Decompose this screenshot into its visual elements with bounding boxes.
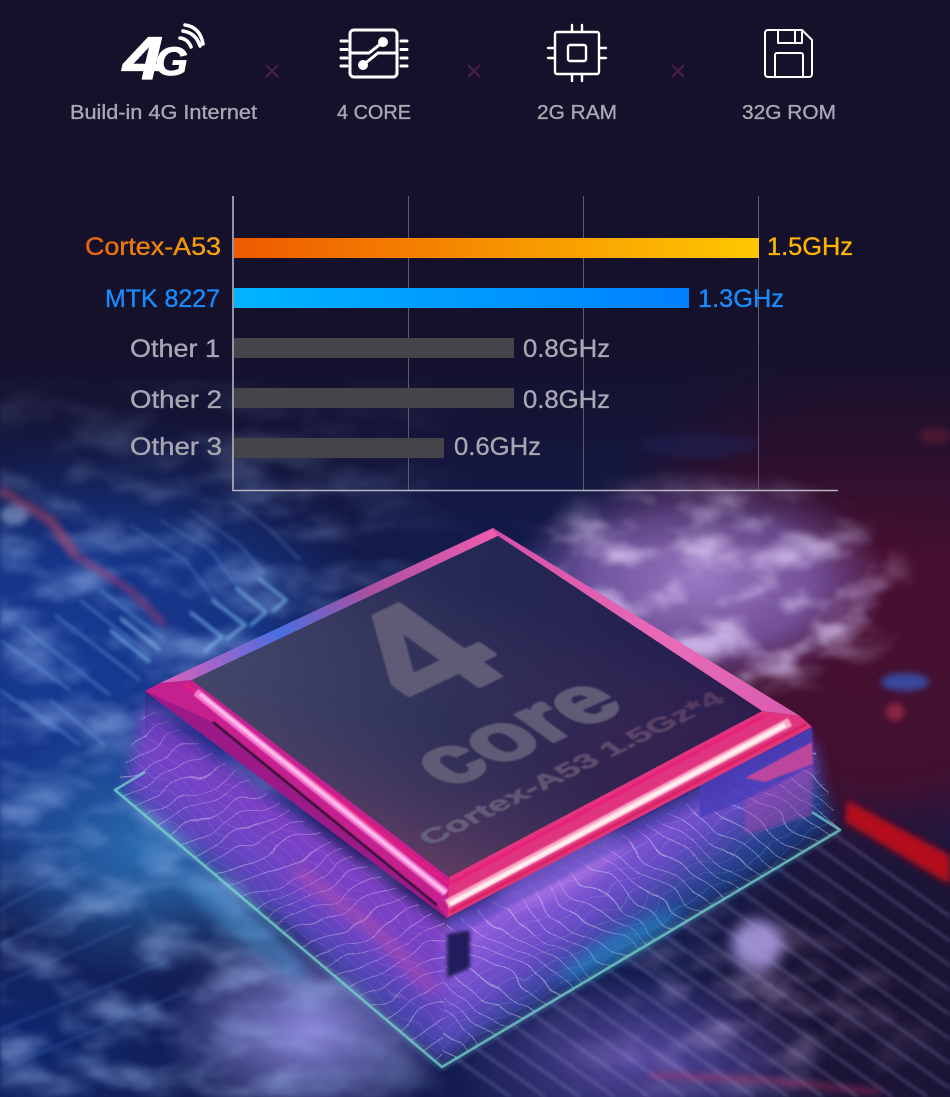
chip frame: right front band xyxy=(447,711,812,918)
row: Cortex-A53: 1.5GHz xyxy=(767,233,853,261)
circuit pad glow xyxy=(125,705,832,1060)
circuit pad outer traces xyxy=(442,830,950,1097)
row: Other 1: Other 1 xyxy=(130,335,220,363)
chip frame glow lines xyxy=(185,684,806,912)
chip frame: top left edge xyxy=(160,528,498,683)
chip frame: left front band xyxy=(145,680,449,918)
row: Cortex-A53 xyxy=(85,233,853,261)
row: Other 3: 0.6GHz xyxy=(454,433,541,461)
row: MTK 8227: MTK 8227 xyxy=(105,285,220,313)
row: Other 2 xyxy=(130,386,610,414)
chip block sides xyxy=(145,691,813,978)
background accent: colored traces xyxy=(0,427,950,1092)
separator xyxy=(468,65,480,77)
row: Other 2: Other 2 xyxy=(130,386,222,414)
circuit pad traces: right xyxy=(442,741,840,1062)
label: 2G RAM: 2G RAM xyxy=(537,102,617,124)
row: Other 3: Other 3 xyxy=(130,433,222,461)
icon: 4 core chip xyxy=(341,30,407,77)
icon: RAM chip xyxy=(548,25,606,81)
feature row xyxy=(70,25,836,124)
chip marking: 4 core text: Cortex-A53 1.5Gz*4 xyxy=(411,687,732,849)
background texture: blue mottling xyxy=(0,380,480,1097)
row: Cortex-A53: Cortex-A53 xyxy=(85,233,221,261)
background traces: chevrons beside chip xyxy=(110,578,286,662)
row: Other 1 xyxy=(130,335,610,363)
chart grid xyxy=(408,196,758,490)
chip marking: 4 core text xyxy=(294,574,732,849)
label: build-in 4G internet: Build-in 4G Internet xyxy=(70,102,257,124)
separator xyxy=(672,65,684,77)
label: 32G ROM: 32G ROM xyxy=(742,102,836,124)
icon: ROM floppy disk xyxy=(765,30,812,77)
chart axes xyxy=(233,196,838,490)
row: Other 2: 0.8GHz xyxy=(523,386,610,414)
circuit pad highlights xyxy=(173,819,687,990)
background texture: lavender traces xyxy=(536,473,912,697)
chip marking: 4 core text: 4 xyxy=(294,574,547,733)
label: 4 core: 4 CORE xyxy=(337,102,411,124)
icon: 4G signal: G xyxy=(155,40,188,84)
background traces: left xyxy=(0,500,300,1070)
row: Other 1: 0.8GHz xyxy=(523,335,610,363)
circuit pad traces: left xyxy=(116,705,447,1060)
circuit pad outline xyxy=(115,772,840,1067)
background texture: lower right traces xyxy=(550,902,930,1097)
icon: 4G signal: 4 xyxy=(122,25,163,92)
chip frame: left outer shade xyxy=(145,691,447,918)
processor chip on circuit pad xyxy=(80,528,950,1097)
chip frame: top right edge xyxy=(493,528,800,716)
row: MTK 8227 xyxy=(105,285,784,313)
separator xyxy=(266,65,278,77)
bar chart: clock speed comparison xyxy=(85,196,853,490)
row: Other 3 xyxy=(130,433,541,461)
chip marking: 4 core text: core xyxy=(384,662,643,800)
background accent: dark top fade xyxy=(0,0,950,560)
icon: 4G signal xyxy=(122,25,203,92)
chip top face xyxy=(192,536,762,877)
row: MTK 8227: 1.3GHz xyxy=(698,285,784,313)
bokeh component xyxy=(731,919,783,971)
